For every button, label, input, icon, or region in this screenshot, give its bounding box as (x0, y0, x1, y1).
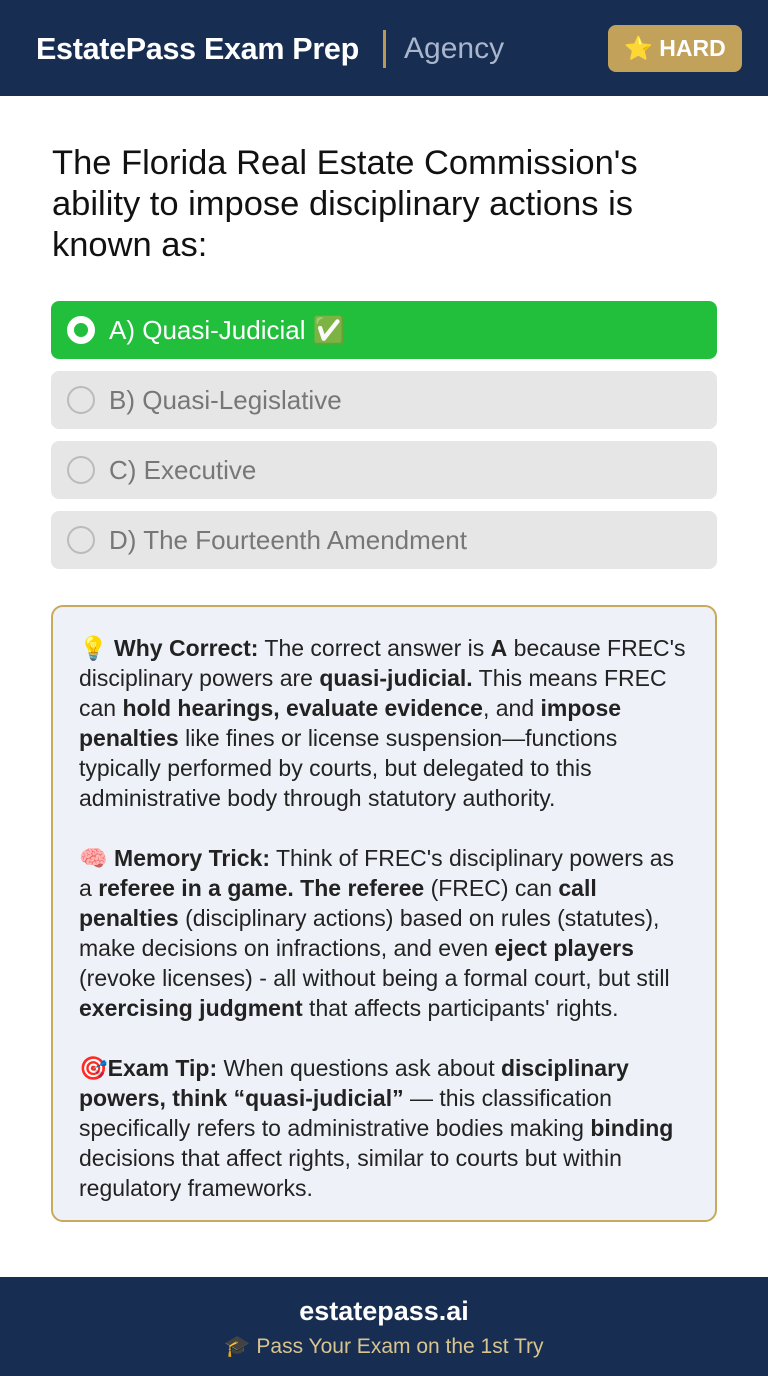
footer tagline: 🎓 Pass Your Exam on the 1st Try (224, 1335, 544, 1358)
option B (51, 371, 717, 429)
footer site: estatepass.ai (299, 1296, 469, 1326)
option A correct: A) Quasi-Judicial ✅ (109, 315, 345, 345)
difficulty badge (608, 25, 742, 72)
header bar (0, 0, 768, 96)
footer (0, 1277, 768, 1376)
option C (51, 441, 717, 499)
question: The Florida Real Estate Commission's ability to impose disciplinary actions is known as: (52, 144, 638, 264)
option A correct (51, 301, 717, 359)
brand title: EstatePass Exam Prep (36, 32, 359, 66)
difficulty badge: ⭐ HARD (624, 35, 726, 61)
exam tip: 🎯Exam Tip: When questions ask about disciplinary powers, think “quasi-judicial” — this classification specifically refers to administrative bodies making binding decisions that affect rights, similar to courts but within regulatory frameworks. (79, 1055, 673, 1201)
option C: C) Executive (109, 455, 256, 485)
option D (51, 511, 717, 569)
explanation panel (51, 605, 717, 1222)
category: Agency (404, 32, 504, 65)
option D: D) The Fourteenth Amendment (109, 525, 467, 555)
option B: B) Quasi-Legislative (109, 385, 342, 415)
memory trick: 🧠 Memory Trick: Think of FREC's disciplinary powers as a referee in a game. The referee (FREC) can call penalties (disciplinary actions) based on rules (statutes), make decisions on infractions, and even eject players (revoke licenses) - all without being a formal court, but still exercising judgment that affects participants' rights. (79, 845, 674, 1021)
why correct: 💡 Why Correct: The correct answer is A because FREC's disciplinary powers are quasi-judicial. This means FREC can hold hearings, evaluate evidence, and impose penalties like fines or license suspension—functions typically performed by courts, but delegated to this administrative body through statutory authority. (79, 635, 686, 811)
